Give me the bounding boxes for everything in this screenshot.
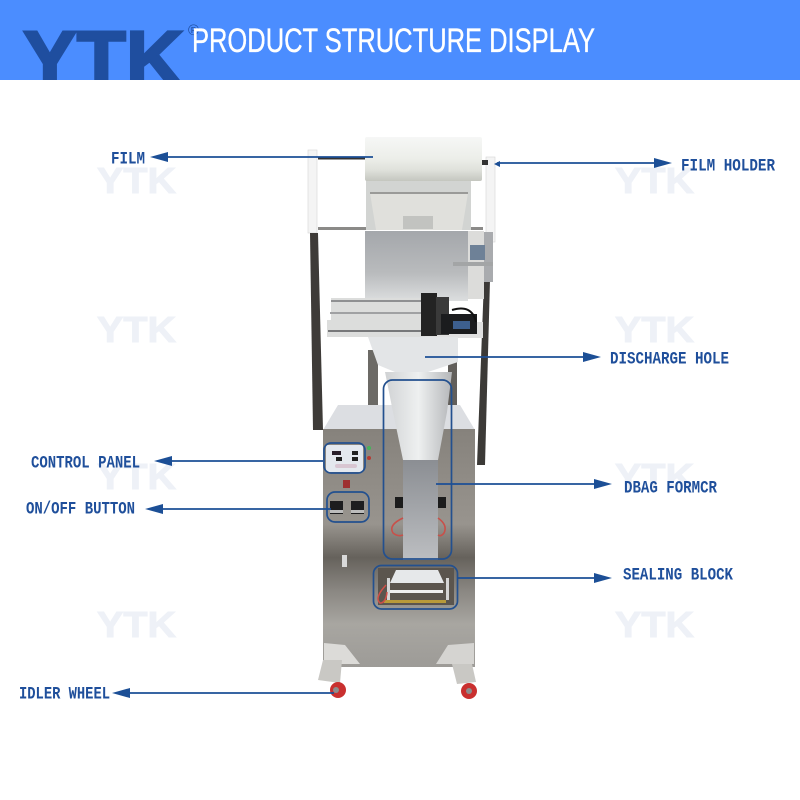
film cone — [368, 337, 458, 372]
label: on/off button — [26, 499, 331, 519]
right foot — [452, 664, 476, 684]
label: idler wheel — [19, 684, 334, 704]
label: sealing block — [457, 565, 733, 585]
cabinet — [323, 429, 475, 667]
control panel — [326, 445, 371, 488]
upper hopper — [366, 180, 471, 230]
header banner — [0, 0, 800, 80]
indicator lights — [343, 446, 371, 488]
watermarks: YTK — [615, 309, 694, 350]
former funnel — [385, 372, 452, 460]
label: discharge hole: DISCHARGE HOLE — [610, 349, 729, 369]
former chute — [403, 460, 438, 560]
label: discharge hole — [425, 349, 729, 369]
arrow: bag former — [436, 479, 612, 489]
label: control panel: CONTROL PANEL — [31, 453, 140, 473]
arrow: sealing block — [457, 573, 612, 583]
arrow: control panel — [154, 456, 323, 466]
arrow: on/off button — [145, 504, 331, 514]
label: on/off button: ON/OFF BUTTON — [26, 499, 135, 519]
arrow: discharge hole — [425, 352, 601, 362]
label: film holder — [494, 156, 775, 176]
valve — [342, 555, 347, 567]
right wheel — [461, 683, 477, 699]
on/off buttons — [330, 501, 364, 514]
watermarks: YTK — [97, 456, 176, 497]
watermarks: YTK — [615, 160, 694, 201]
back panel — [365, 231, 493, 301]
title: PRODUCT STRUCTURE DISPLAY — [192, 22, 595, 60]
watermarks — [97, 160, 694, 645]
label: film: FILM — [111, 149, 145, 169]
print bar — [327, 298, 483, 338]
arrow: idler wheel — [112, 688, 334, 698]
callout boxes — [324, 380, 458, 609]
registered mark: ® — [188, 22, 199, 39]
arrow: film — [150, 152, 373, 162]
YTK logo: YTK — [23, 14, 184, 103]
left frame post — [308, 150, 323, 430]
label: film — [111, 149, 373, 169]
watermarks: YTK — [97, 160, 176, 201]
base highlights — [324, 643, 474, 664]
coding unit and motor — [421, 293, 477, 336]
label: sealing block: SEALING BLOCK — [623, 565, 733, 585]
left foot — [318, 660, 342, 683]
watermarks: YTK — [615, 604, 694, 645]
watermarks: YTK — [615, 456, 694, 497]
label: bag former — [436, 478, 717, 498]
label: bag former: DBAG FORMCR — [624, 478, 717, 498]
legs behind former — [368, 350, 457, 405]
packaging machine — [308, 137, 495, 699]
label: idler wheel: IDLER WHEEL — [19, 684, 110, 704]
cross bars — [318, 157, 488, 230]
right frame post — [477, 157, 495, 465]
label: control panel — [31, 453, 323, 473]
machine table — [323, 405, 475, 430]
left wheel — [330, 682, 346, 698]
arrow: film holder — [494, 158, 672, 168]
wiring and brackets — [392, 497, 446, 536]
film roll — [365, 137, 482, 181]
sealing block — [378, 568, 454, 605]
watermarks: YTK — [97, 604, 176, 645]
watermarks: YTK — [97, 309, 176, 350]
label: film holder: FILM HOLDER — [681, 156, 775, 176]
